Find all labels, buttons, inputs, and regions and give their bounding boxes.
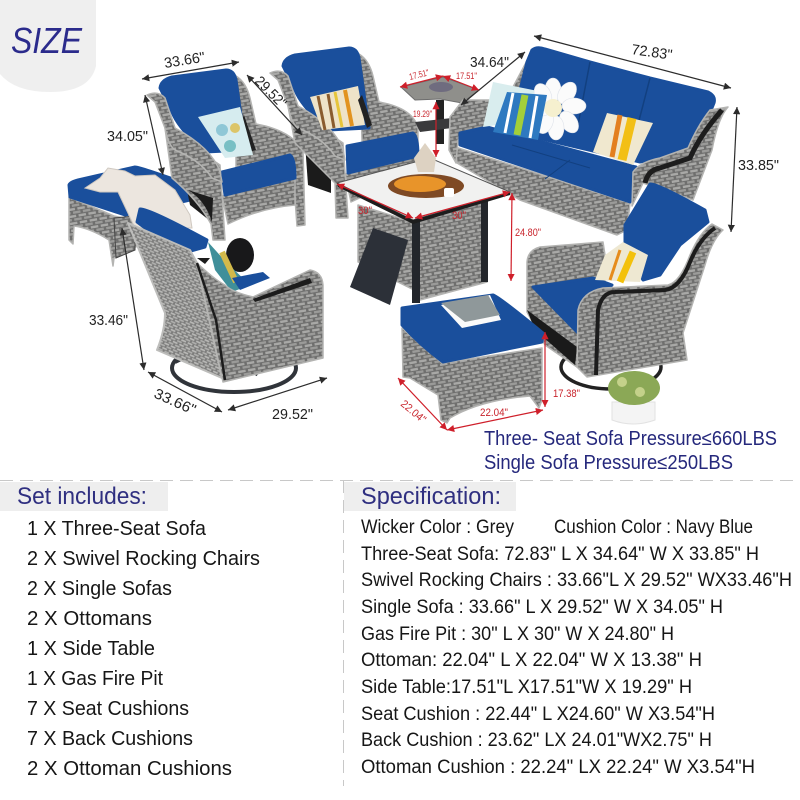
dimension: single sofa depth: 29.52" [251, 74, 289, 112]
dimension: side table depth: 17.51" [456, 71, 477, 81]
dimension: ottoman height [545, 332, 580, 407]
icon: daisy pillow [531, 78, 586, 140]
dimension: sofa height: 33.85" [738, 158, 779, 174]
dimension: side table height [413, 102, 436, 157]
dimension: side table depth [443, 71, 479, 90]
panel: set includes: 1 X Gas Fire Pit [27, 667, 163, 690]
dimension: ottoman depth: 22.04" [398, 398, 428, 426]
swivel rocking chair: right [527, 184, 723, 389]
panel: set includes: 2 X Single Sofas [27, 577, 172, 600]
dimension: swivel chair height [89, 228, 144, 370]
panel: specification: Side Table:17.51"L X17.51"W X 19.29" H [361, 677, 692, 698]
panel: specification [344, 482, 792, 778]
dimension: ottoman depth [398, 378, 447, 430]
panel: set includes: 1 X Three-Seat Sofa [27, 517, 207, 540]
potted plant [608, 371, 660, 424]
dimension: fire pit length [337, 184, 413, 218]
panel: specification: Wicker Color : Grey [361, 517, 514, 538]
dimension: sofa depth [461, 52, 525, 105]
dimension: swivel chair length [148, 372, 222, 419]
panel: specification: Swivel Rocking Chairs : 33.66"L X 29.52" WX33.46"H [361, 570, 792, 591]
panel: specification: Single Sofa : 33.66" L X 29.52" W X 34.05" H [361, 597, 723, 618]
dimension: single sofa width [142, 50, 239, 79]
dimension: single sofa height: 34.05" [107, 129, 148, 145]
dimension: fire pit height: 24.80" [515, 227, 541, 239]
weight capacity note: Three- Seat Sofa Pressure≤660LBS [484, 428, 777, 450]
fire pit table [337, 143, 510, 305]
panel: specification: Three-Seat Sofa: 72.83" L X 34.64" W X 33.85" H [361, 544, 759, 565]
dimension: sofa length [534, 36, 731, 88]
dimension: swivel chair width [228, 378, 327, 423]
dimension: ottoman width [447, 407, 543, 430]
dimension: single sofa depth [247, 74, 302, 135]
side table [401, 77, 479, 144]
dimension: swivel chair height: 33.46" [89, 313, 128, 329]
panel: set includes: 2 X Ottoman Cushions [27, 757, 232, 780]
dimension: side table width: 17.51" [408, 67, 430, 82]
dimension: single sofa height [107, 95, 163, 175]
weight capacity note: Single Sofa Pressure≤250LBS [484, 452, 733, 474]
dimension: single sofa width: 33.66" [163, 50, 206, 72]
panel: set includes: 2 X Ottomans [27, 607, 152, 630]
ottoman: left [69, 167, 190, 266]
dimension: side table height: 19.29" [413, 109, 432, 119]
dimension: sofa height [731, 107, 779, 232]
size badge: SIZE [11, 20, 83, 61]
three-seat sofa [449, 48, 728, 235]
swivel rocking chair: left [128, 209, 323, 392]
panel: set includes [0, 482, 260, 780]
panel: specification: Gas Fire Pit : 30" L X 30" W X 24.80" H [361, 624, 674, 645]
dimension: fire pit width: 30" [452, 210, 466, 222]
dimension: sofa length: 72.83" [630, 42, 673, 64]
panel: specification: Ottoman Cushion : 22.24" LX 22.24" W X3.54"H [361, 757, 755, 778]
panel: set includes: Set includes: [17, 483, 147, 510]
panel: specification: Cushion Color : Navy Blue [554, 517, 753, 538]
panel: specification: Back Cushion : 23.62" LX 24.01"WX2.75" H [361, 730, 712, 751]
dimension: swivel chair width: 29.52" [272, 407, 313, 423]
panel: set includes: 1 X Side Table [27, 637, 155, 660]
panel: set includes: 2 X Swivel Rocking Chairs [27, 547, 260, 570]
dimension: fire pit width [415, 192, 510, 222]
panel: specification: Specification: [361, 483, 501, 510]
size badge [0, 0, 96, 92]
panel: specification: Ottoman: 22.04" L X 22.04" W X 13.38" H [361, 650, 702, 671]
dimension: fire pit height [511, 193, 541, 281]
weight capacity note [484, 428, 777, 474]
dimension: swivel chair length: 33.66" [151, 386, 198, 419]
panel: specification: Seat Cushion : 22.44" L X24.60" W X3.54"H [361, 704, 715, 725]
single sofa: middle [270, 48, 418, 218]
dimension: sofa depth: 34.64" [470, 55, 509, 71]
dimension: ottoman height: 17.38" [553, 388, 580, 400]
ottoman: right [402, 295, 543, 423]
panel: set includes: 7 X Back Cushions [27, 727, 193, 750]
single sofa: left [147, 70, 305, 240]
throw blanket [85, 168, 192, 228]
dimension: side table width [400, 67, 443, 87]
dimension: fire pit length: 30" [358, 205, 372, 217]
dimension: ottoman width: 22.04" [480, 407, 508, 419]
panel: set includes: 7 X Seat Cushions [27, 697, 189, 720]
